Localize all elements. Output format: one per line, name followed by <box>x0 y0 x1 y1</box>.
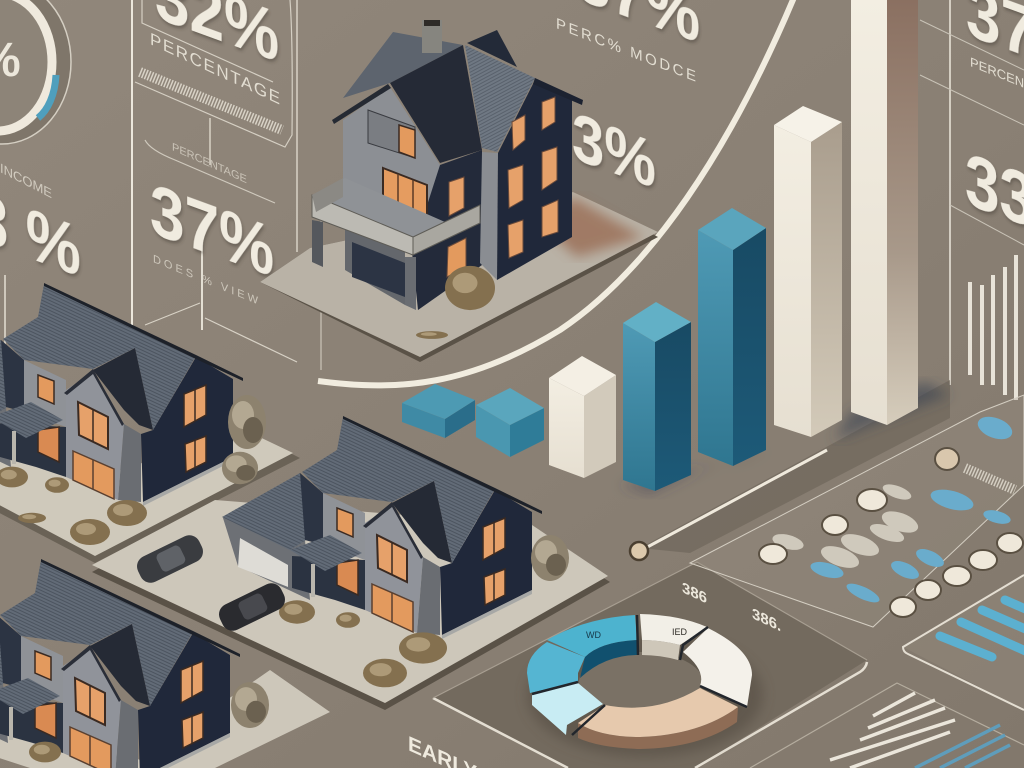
windows <box>368 110 415 158</box>
panel: donut chart card: WD <box>586 630 601 640</box>
stat: 37% left card: 37% <box>150 168 274 293</box>
panel: lower-right blue lines <box>903 575 1024 710</box>
stat: 3% beside house: 3% <box>572 98 656 203</box>
car: lower <box>215 580 289 634</box>
panel: donut chart card <box>433 562 867 768</box>
bar 4 <box>623 302 691 491</box>
growth curve <box>318 0 795 385</box>
label: left card caption: PERCENTAGE <box>172 141 247 186</box>
panel: right data table <box>690 395 1024 627</box>
segment: tan <box>578 688 738 749</box>
pointer line with dot <box>630 450 827 560</box>
bar 3 <box>549 356 616 478</box>
panel: upper-right percent card <box>920 0 1024 400</box>
car: upper <box>133 532 207 586</box>
walls <box>343 87 440 223</box>
hole <box>579 652 703 712</box>
bar chart <box>402 0 918 491</box>
segment: cream top <box>640 614 707 660</box>
label: caption under 37%: DOES % VIEW <box>153 253 258 307</box>
main house <box>260 20 658 362</box>
segment: teal top <box>547 615 638 678</box>
segment: teal left <box>527 642 585 693</box>
balcony <box>312 178 445 237</box>
donut chart <box>527 614 763 757</box>
bar platform shadow <box>620 380 950 553</box>
panel: upper-left percentage cards <box>5 0 321 370</box>
center house <box>92 416 610 710</box>
roofs <box>390 45 482 163</box>
shrubs <box>445 266 495 310</box>
bar 6 <box>774 106 842 437</box>
bar 7 <box>851 0 918 425</box>
bar 2 <box>476 388 544 457</box>
markers <box>759 448 1023 617</box>
gauge ring: top left <box>0 0 71 144</box>
segment: cream right <box>683 628 752 707</box>
panel: donut chart card: IED <box>672 627 688 637</box>
label: percentage: PERCENTAGE <box>150 29 280 108</box>
pad <box>260 192 658 362</box>
garage and posts <box>352 242 405 297</box>
bar 5 <box>698 208 766 466</box>
labels: donut: 386 <box>682 580 707 608</box>
segment: light blue <box>532 683 603 735</box>
bottom-left house <box>0 559 330 768</box>
panel: donut chart card: 386. <box>752 606 781 635</box>
label: far left caption: INCOME <box>0 160 52 201</box>
left house <box>0 283 300 563</box>
back roofs and chimney <box>343 32 463 98</box>
label: top middle caption: PERC% MODCE <box>556 15 696 86</box>
bar 1 <box>402 384 475 438</box>
panel: bottom-right stripes <box>750 683 1024 768</box>
